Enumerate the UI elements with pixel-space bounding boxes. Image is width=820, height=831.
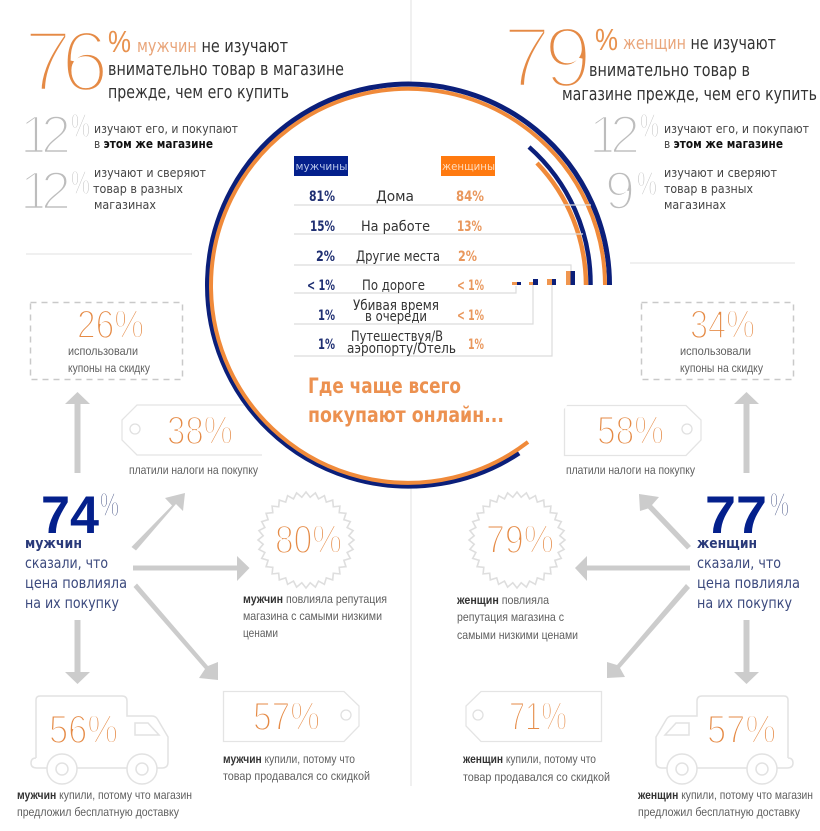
stat 9% different stores: % (637, 165, 657, 202)
row: home: 81% (309, 189, 335, 205)
stat 9% different stores: товар в разных (664, 182, 753, 196)
panel: women discount tag: женщин купили, потому что (462, 752, 596, 766)
stat 12% same store (589, 105, 809, 165)
panel: women discount tag (462, 692, 610, 784)
stat 12% same store: изучают его, и покупают (664, 122, 809, 136)
stat: women 77%: 77 (705, 486, 767, 545)
panel: men discount tag (223, 692, 370, 783)
arrow down to truck (734, 620, 759, 684)
stat: men 74%: мужчин (25, 536, 82, 552)
stat: women 77%: цена повлияла (697, 574, 800, 592)
stat 76%: 76 (24, 14, 109, 110)
panel: women reputation seal: женщин повлияла (456, 593, 549, 607)
row: other places (316, 249, 477, 265)
panel: men top stat: прежде, чем его купить (108, 83, 289, 103)
stat 12% same store: 12 (589, 105, 640, 165)
panel: women top stat (503, 10, 817, 221)
panel: women delivery truck (637, 696, 813, 819)
row: killing time in line: 1% (318, 308, 335, 324)
panel: women reputation seal: репутация магазина с (457, 610, 564, 624)
stat: men 74%: 74 (41, 486, 100, 545)
row: at work: 13% (457, 219, 482, 235)
arrow up to coupons (65, 392, 90, 473)
row: on the road: По дороге (362, 278, 425, 294)
arrow down to truck (65, 620, 90, 684)
row: killing time in line: < 1% (457, 308, 484, 324)
legend: men: мужчины (296, 160, 348, 173)
panel: men reputation seal: ценами (243, 626, 278, 640)
arrow right to seal (133, 556, 250, 581)
stat 12% different stores: 12 (20, 161, 71, 221)
arrows: women (575, 392, 759, 684)
row: on the road: < 1% (457, 278, 484, 294)
legend: women: женщины (442, 160, 495, 173)
stat 12% same store: % (640, 107, 659, 144)
arrow up-right to tax tag (132, 493, 185, 550)
panel: men delivery truck: предложил бесплатную доставку (17, 805, 179, 819)
stat 12% different stores: % (71, 164, 90, 201)
stat 9% different stores: 9 (605, 161, 635, 221)
panel: women discount tag: 71% (509, 695, 567, 739)
circle panel: where people shop online (207, 84, 609, 486)
statement text: женщин не изучают (623, 34, 776, 54)
arc: inner rings (529, 147, 591, 285)
stat 12% same store: в этом же магазине (664, 137, 783, 151)
panel: women tax tag: 58% (597, 409, 664, 453)
stat 12% same store (20, 105, 238, 165)
stat 12% same store: в этом же магазине (94, 137, 213, 151)
icon: truck (656, 696, 793, 784)
row: on the road: < 1% (307, 278, 335, 294)
panel: men coupons box (30, 302, 182, 380)
panel: women reputation seal: самыми низкими ценами (457, 628, 578, 642)
panel: men tax tag: 38% (167, 409, 233, 453)
panel: women coupons box (642, 302, 794, 380)
statement text: мужчин не изучают (137, 37, 288, 57)
arrow left to seal (575, 556, 690, 581)
row: killing time in line: Убивая время (353, 298, 439, 314)
row: home: 84% (456, 189, 484, 205)
panel: women tax tag: платили налоги на покупку (566, 463, 695, 477)
row: at work (310, 219, 482, 235)
panel: men delivery truck: 56% (49, 708, 118, 752)
legend: men (294, 156, 348, 176)
row: travelling airport hotel: 1% (468, 337, 484, 353)
panel: men coupons box: купоны на скидку (68, 361, 150, 375)
panel: women coupons box: использовали (680, 344, 751, 358)
panel: men top stat (20, 14, 344, 221)
panel: women delivery truck: предложил бесплатную доставку (638, 805, 800, 819)
stat 79%: 79 (503, 10, 592, 106)
stat 76%: % (108, 24, 131, 59)
panel: men delivery truck: мужчин купили, потому что магазин (17, 788, 192, 802)
row: at work: 15% (310, 219, 335, 235)
panel: men reputation seal (243, 492, 387, 640)
panel: men tax tag: платили налоги на покупку (129, 463, 258, 477)
stat: men 74% (25, 486, 127, 612)
icon: seal (258, 492, 354, 588)
circle background (210, 86, 608, 484)
panel: women coupons box: купоны на скидку (680, 361, 763, 375)
panel: women reputation seal: 79% (486, 518, 554, 562)
row: other places: 2% (316, 249, 335, 265)
stat: men 74%: сказали, что (25, 554, 108, 572)
stat: women 77%: % (770, 486, 789, 523)
stat 12% different stores (20, 161, 206, 221)
panel: men discount tag: мужчин купили, потому что (223, 752, 355, 766)
stat 12% same store: изучают его, и покупают (94, 122, 238, 136)
row: at work: На работе (361, 219, 430, 235)
stat: women 77% (697, 486, 800, 612)
panel: men reputation seal: магазина с самыми низкими (243, 609, 382, 623)
heading: where people shop online: покупают онлайн... (308, 403, 504, 427)
panel: men delivery truck (17, 696, 192, 819)
stat 12% same store: 12 (20, 105, 71, 165)
panel: men reputation seal: мужчин повлияла репутация (243, 592, 387, 606)
stat: women 77%: сказали, что (697, 554, 781, 572)
panel: women tax tag (564, 406, 701, 477)
stat 9% different stores (605, 161, 777, 221)
stat: men 74%: цена повлияла (25, 574, 127, 592)
arrows: men (65, 392, 250, 684)
panel: men coupons box: 26% (77, 303, 144, 347)
panel: men tax tag (122, 405, 262, 477)
stat 12% same store: % (71, 107, 90, 144)
legend: women (441, 156, 495, 176)
heading: where people shop online: Где чаще всего (308, 374, 461, 398)
row: on the road (307, 278, 484, 294)
stat 9% different stores: изучают и сверяют (664, 166, 777, 180)
panel: women top stat: внимательно товар в (589, 61, 750, 81)
panel: men reputation seal: 80% (275, 518, 342, 562)
icon: truck (31, 696, 168, 784)
panel: men top stat: внимательно товар в магазине (108, 60, 344, 80)
arrow up to coupons (734, 392, 759, 473)
heading: where people shop online (308, 374, 504, 427)
row: killing time in line (318, 298, 484, 325)
stat 12% different stores: магазинах (94, 198, 156, 212)
table leader lines (294, 205, 591, 356)
stat: women 77%: на их покупку (697, 594, 792, 612)
panel: women delivery truck: 57% (707, 708, 776, 752)
stat 12% different stores: изучают и сверяют (94, 166, 206, 180)
stat: men 74%: на их покупку (25, 594, 119, 612)
stat: men 74%: % (100, 486, 119, 523)
stat 12% different stores: товар в разных (93, 182, 183, 196)
stat 79%: % (595, 22, 618, 57)
panel: women coupons box: 34% (690, 303, 755, 347)
row: other places: 2% (458, 249, 477, 265)
panel: men discount tag: товар продавался со скидкой (223, 769, 370, 783)
row: home (309, 189, 484, 205)
row: other places: Другие места (356, 249, 440, 265)
arrow down-left to discount tag (607, 584, 690, 678)
panel: women reputation seal (456, 492, 578, 642)
arrow up-left to tax tag (639, 494, 691, 550)
row: home: Дома (376, 189, 414, 205)
row: travelling airport hotel (318, 329, 484, 357)
stat: women 77%: женщин (697, 536, 757, 552)
panel: men discount tag: 57% (253, 695, 320, 739)
panel: men coupons box: использовали (68, 344, 138, 358)
row: travelling airport hotel: аэропорту/Отель (347, 341, 456, 357)
arc: outer rings (207, 84, 609, 486)
icon: seal (469, 492, 565, 588)
bar chart: small bars (512, 271, 575, 285)
panel: women discount tag: товар продавался со скидкой (463, 770, 610, 784)
stat 9% different stores: магазинах (664, 198, 726, 212)
row: travelling airport hotel: Путешествуя/В (351, 329, 443, 345)
row: killing time in line: в очереди (365, 309, 427, 325)
arrow down-right to discount tag (134, 584, 218, 680)
row: travelling airport hotel: 1% (318, 337, 335, 353)
